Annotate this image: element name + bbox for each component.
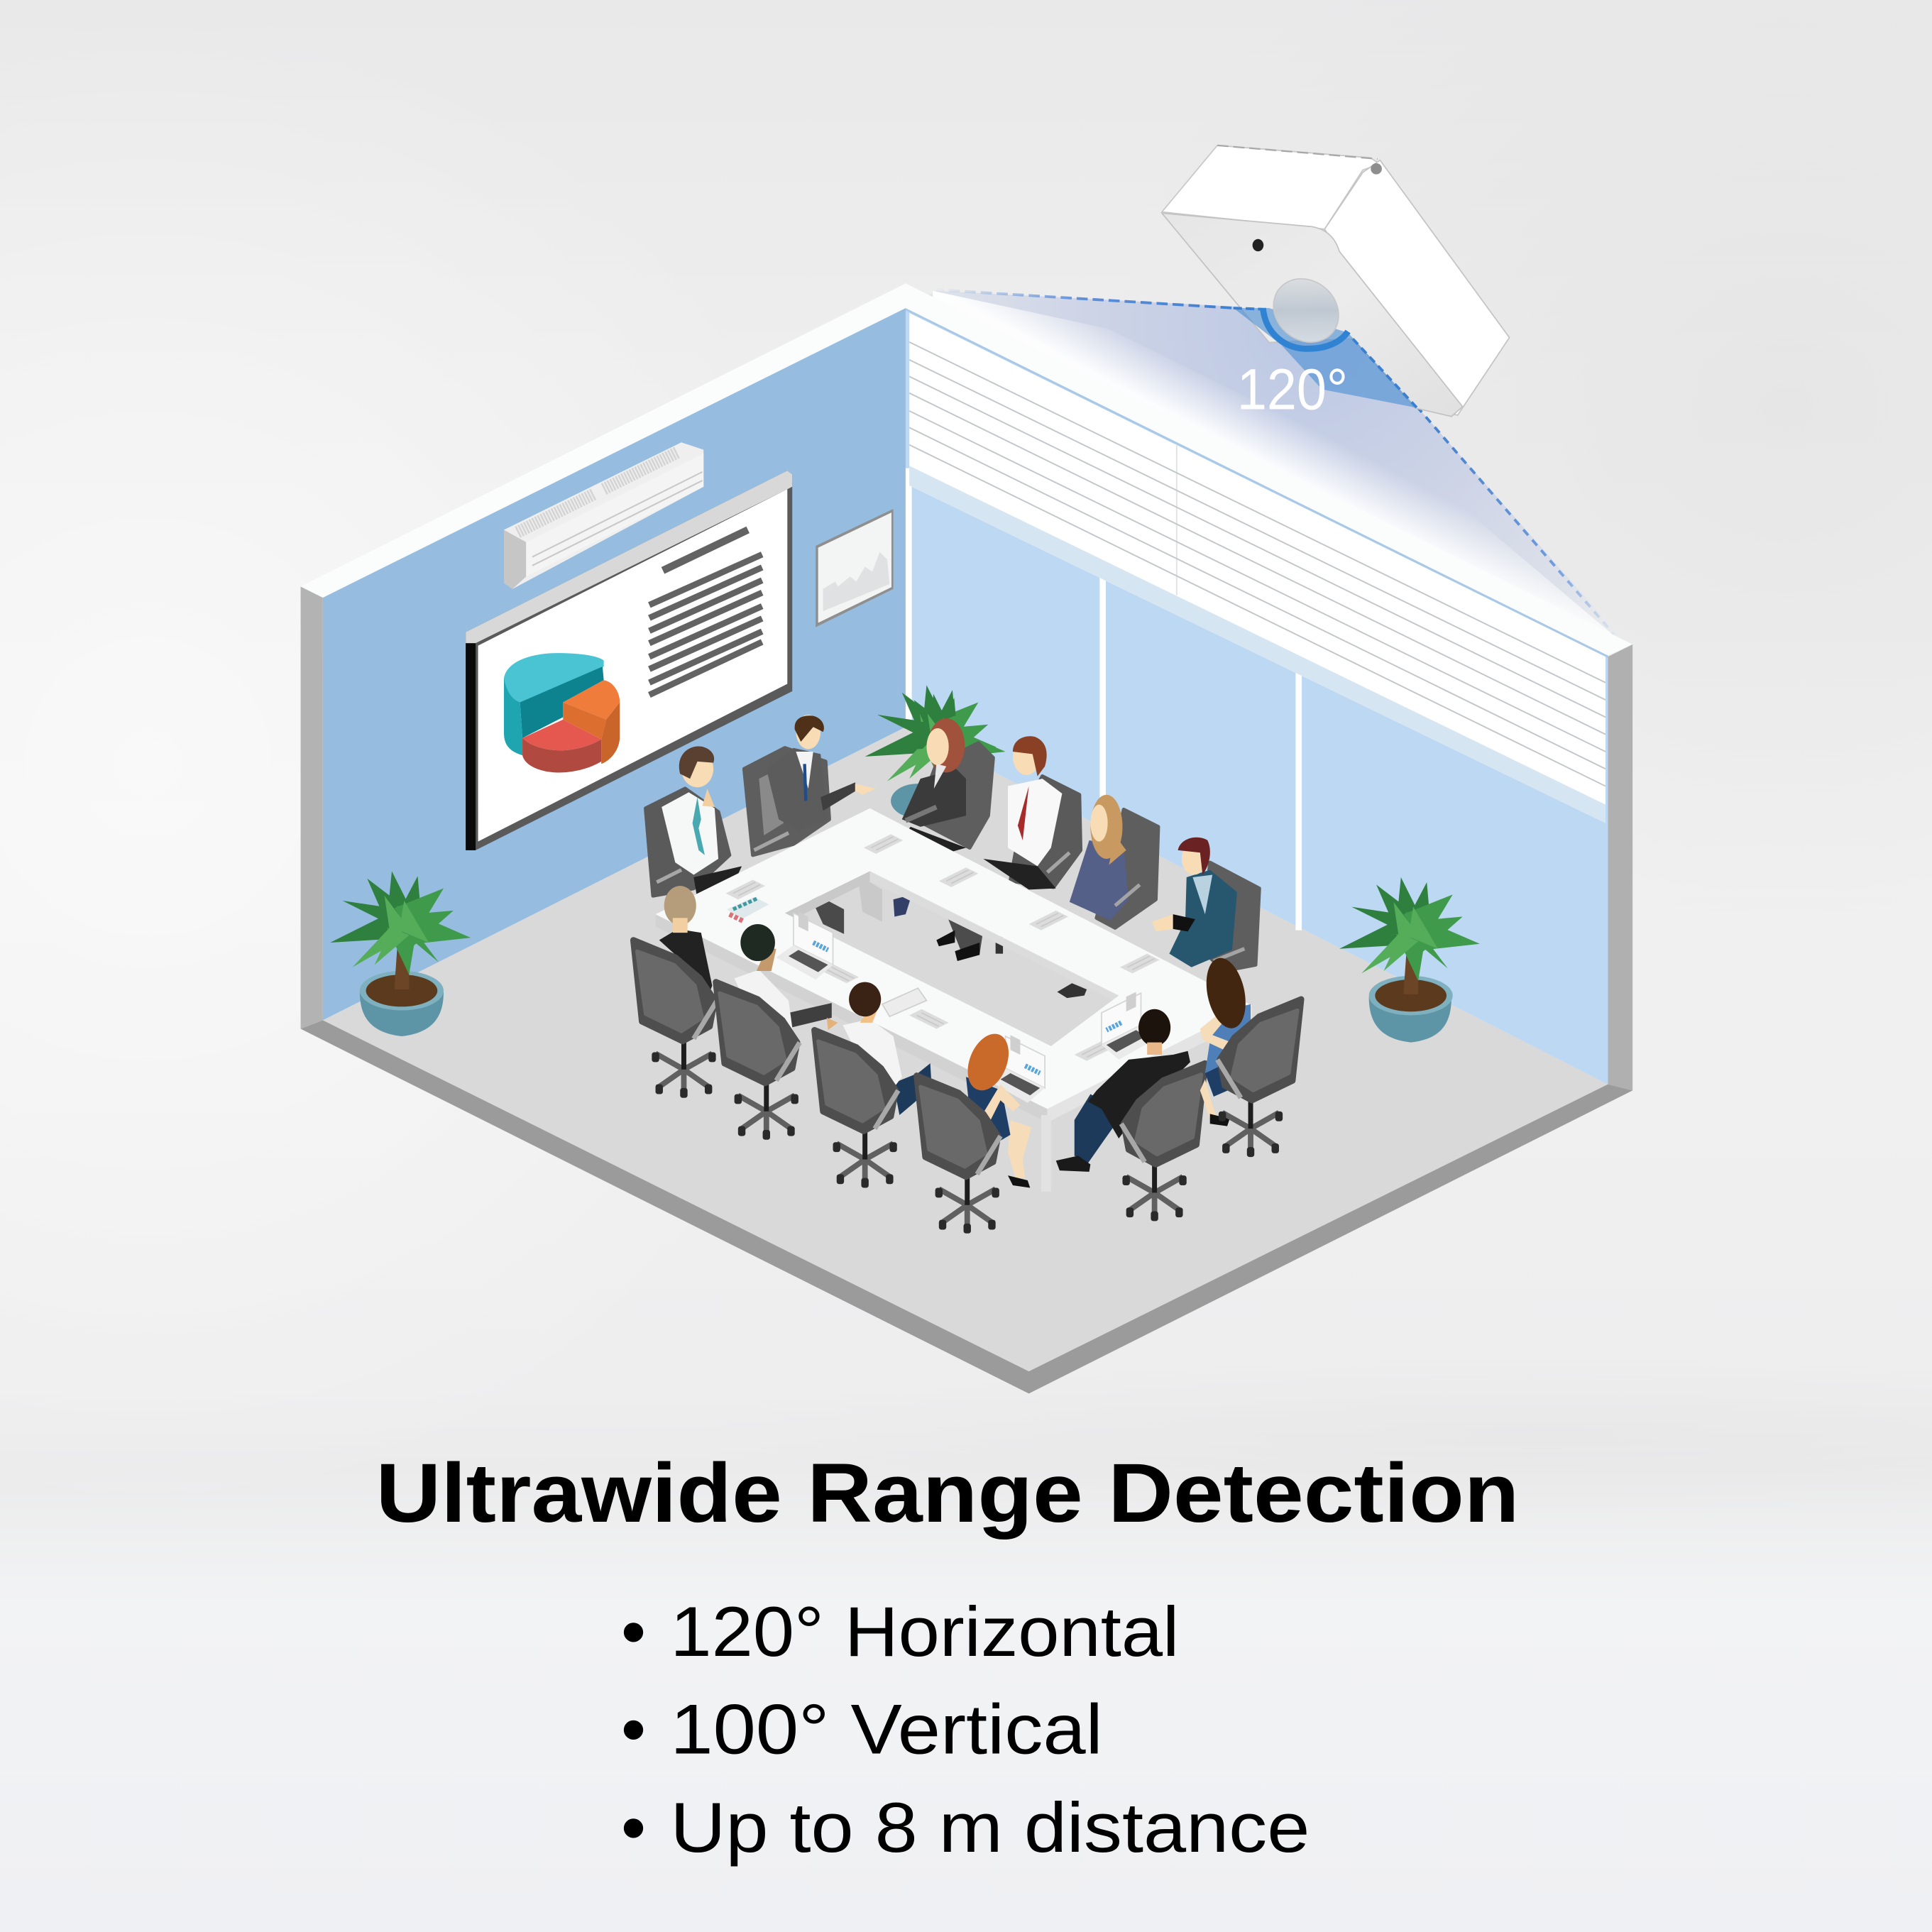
window wall [906, 308, 1608, 1085]
sensor top face [1162, 146, 1380, 229]
conference table [656, 808, 1252, 1192]
blue coverage patch [1234, 308, 1417, 408]
seated person: black shirt, rear view [633, 886, 717, 1098]
seated person: teal suit [1152, 838, 1259, 971]
bullet: distance: • [621, 1788, 646, 1867]
seated person: dark hair white shirt, rear view [716, 924, 838, 1140]
table side [656, 871, 1252, 1192]
table papers [727, 897, 926, 1016]
detection cone [906, 290, 1624, 656]
floor [323, 727, 1608, 1371]
seated person: black shirt jeans, rear view [1056, 1009, 1205, 1221]
bullet: horizontal: • [621, 1592, 646, 1672]
bullet: vertical: 100° Vertical [670, 1689, 1103, 1768]
wall picture [816, 509, 894, 627]
plant: back left [330, 871, 471, 1036]
left wall [323, 308, 906, 1020]
laptops [776, 912, 1158, 1103]
bullet: horizontal: 120° Horizontal [670, 1592, 1179, 1671]
seated person: white shirt teal tie [646, 746, 742, 899]
table mats [725, 834, 1160, 1061]
left wall end [301, 586, 323, 1029]
seated person: woman blue top, rear view [1200, 955, 1301, 1157]
120 degree label: 120° [1237, 357, 1348, 422]
bullet: distance: Up to 8 m distance [670, 1788, 1310, 1867]
window mullions [906, 468, 1302, 931]
sensor screw [1371, 163, 1382, 175]
air conditioner [504, 442, 703, 589]
seated person: woman dark suit [902, 718, 993, 852]
sensor front face [1162, 213, 1463, 417]
plant: rear corner [865, 685, 1006, 818]
plant: right [1339, 877, 1480, 1043]
floor edge [301, 1020, 1632, 1393]
bullet: vertical: • [621, 1689, 646, 1769]
seated person: white shirt red tie [983, 736, 1080, 889]
seated person: woman orange hair, rear view [917, 1028, 1031, 1234]
blue lens ring [1263, 308, 1348, 348]
seated person: woman blue dress blond [1070, 795, 1158, 928]
sensor indicator hole [1253, 239, 1263, 251]
room [301, 283, 1632, 1393]
sensor lens [1261, 265, 1351, 356]
legs under table [807, 875, 1087, 998]
table top [656, 808, 1252, 1109]
sensor right side [1324, 160, 1510, 415]
motion sensor device [1162, 146, 1510, 422]
slide text lines [649, 529, 762, 695]
pie chart [504, 653, 620, 772]
seated person: brown hair white shirt, rear view [814, 982, 931, 1187]
title: Ultrawide Range Detection [375, 1447, 1519, 1540]
wall top band [301, 283, 1632, 656]
seated person: grey suit blue tie [745, 715, 876, 855]
bullet list [621, 1592, 1310, 1867]
blinds [909, 313, 1606, 823]
right wall end [1608, 644, 1632, 1090]
projection screen [466, 471, 792, 850]
